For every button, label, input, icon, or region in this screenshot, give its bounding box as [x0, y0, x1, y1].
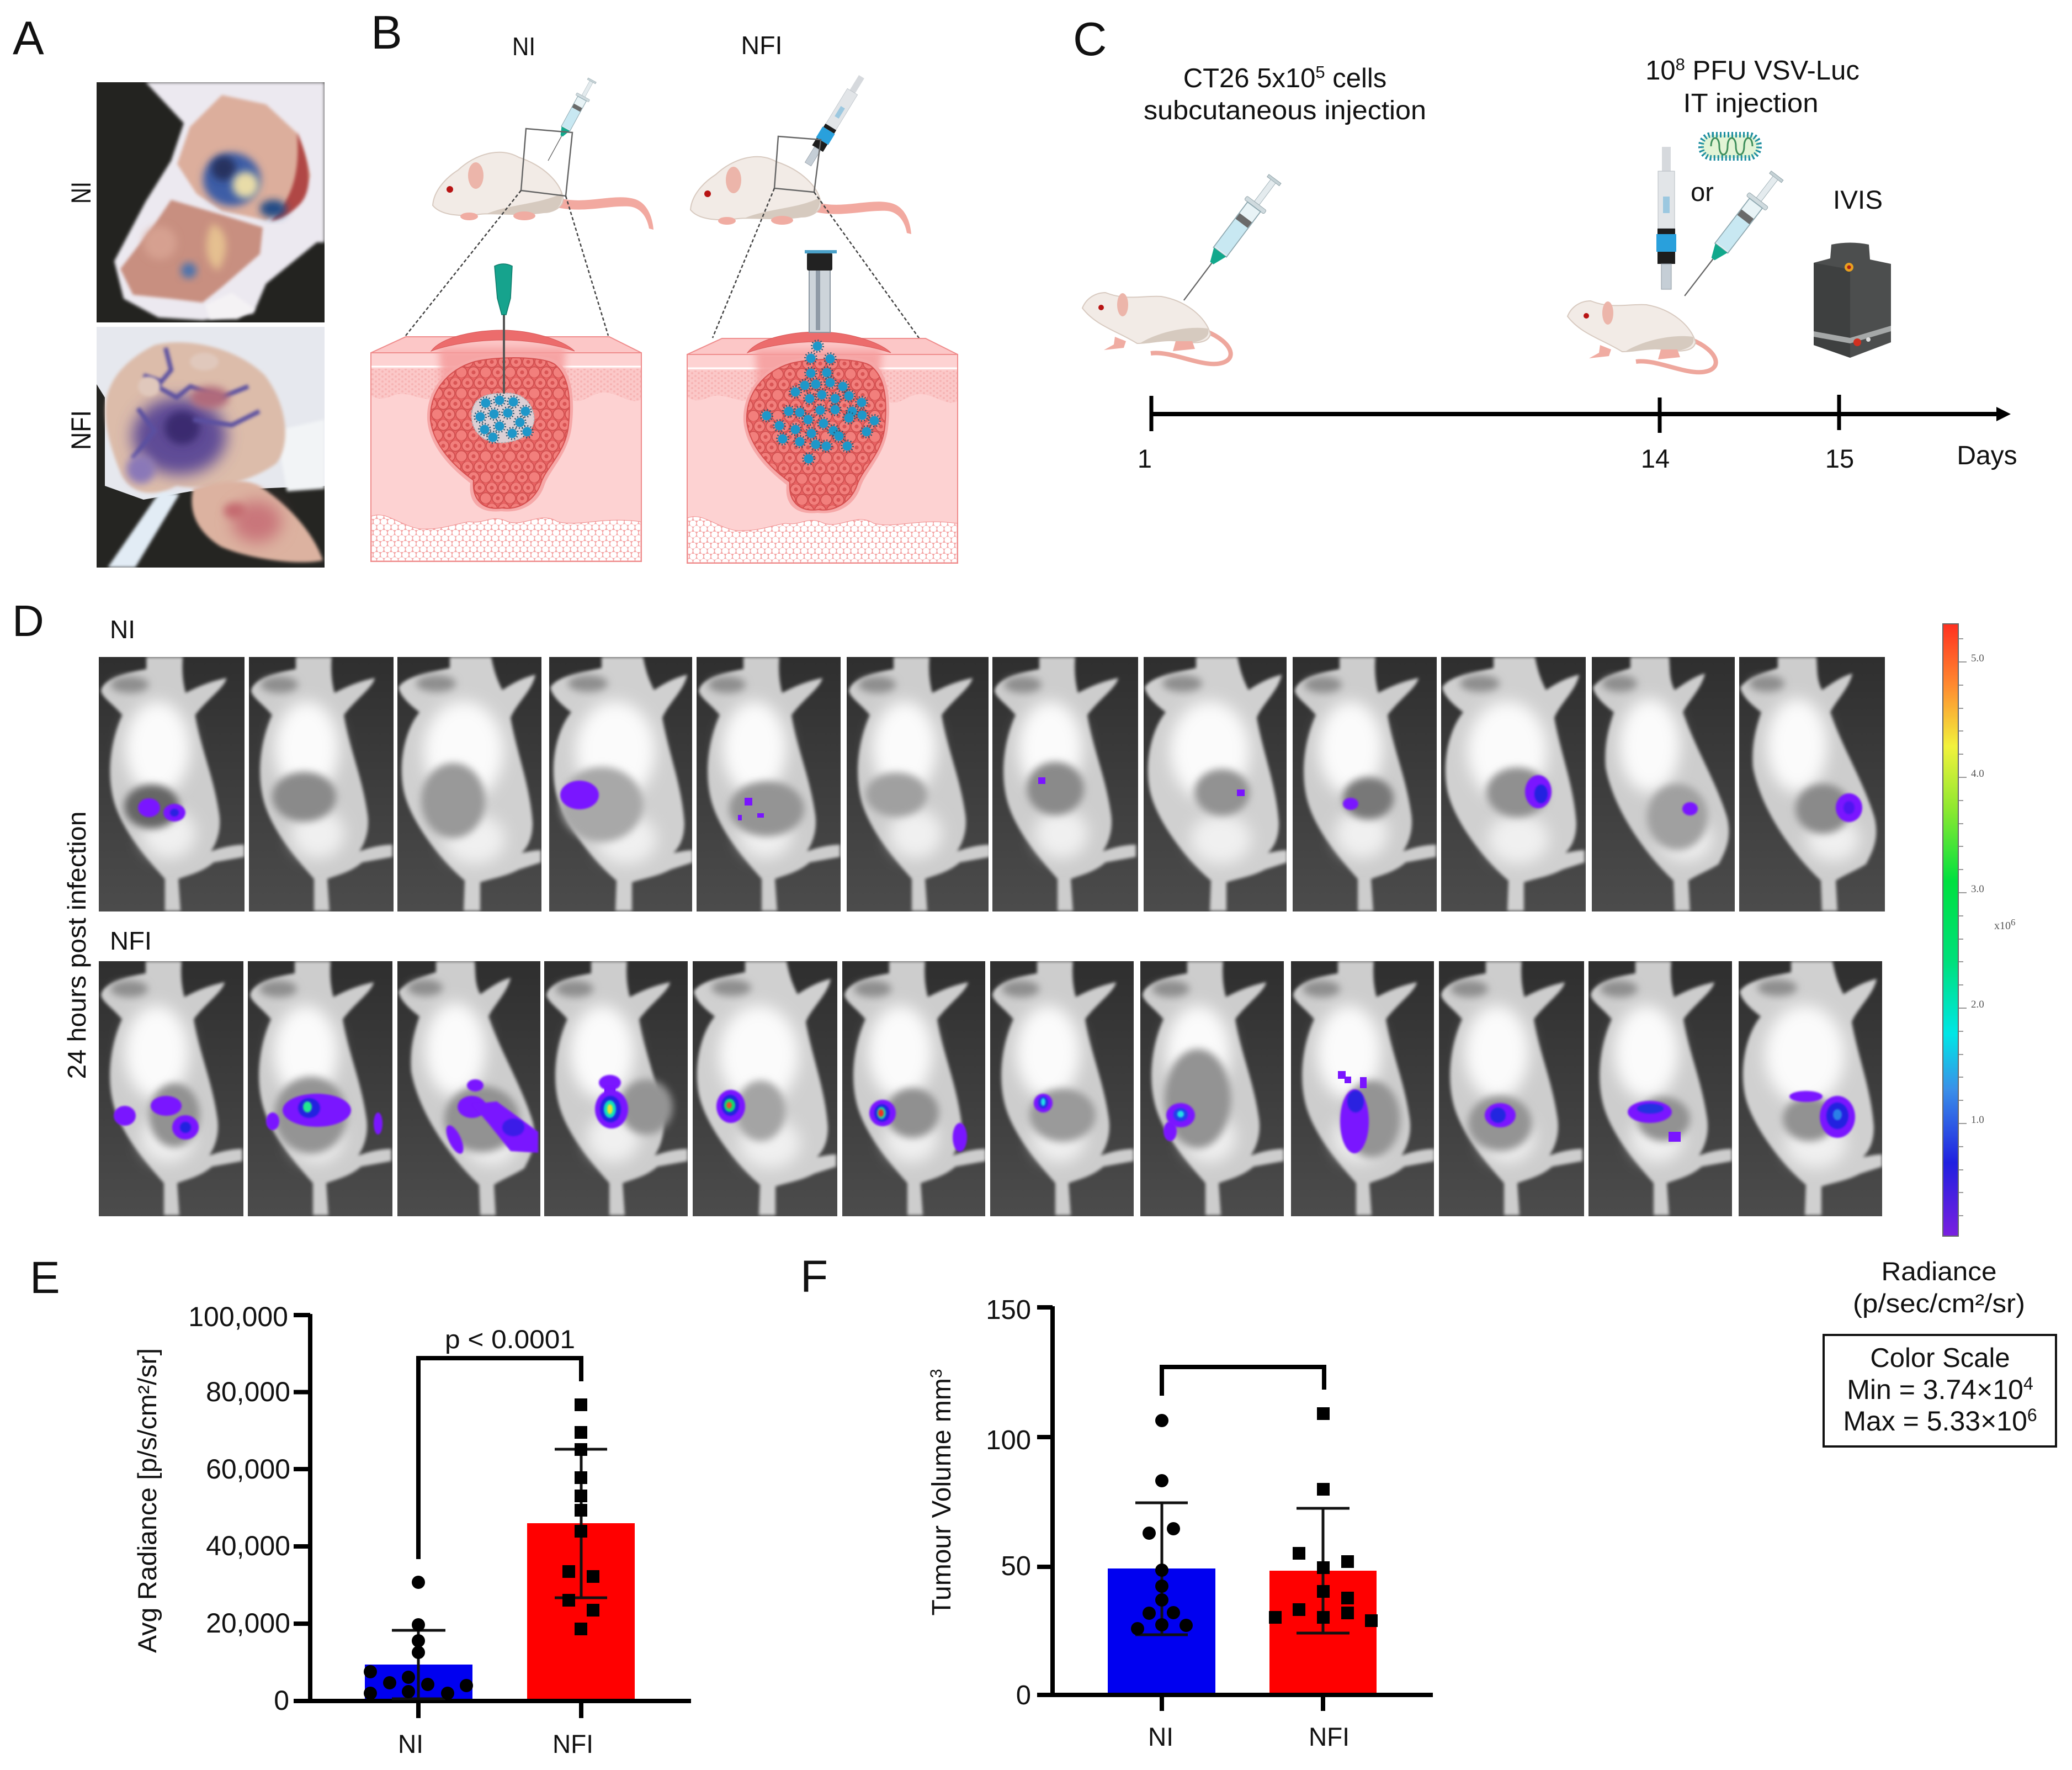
panel A: tumour photographs: [97, 82, 325, 568]
icon: needle-free device NFI: [802, 73, 868, 168]
colour scale title: Radiance: [1881, 1257, 1997, 1286]
heading NFI: NFI: [741, 31, 783, 60]
data points NI: [364, 1576, 473, 1700]
y tick labels: 100,000: [188, 1301, 288, 1332]
text: VSV-Luc dose: 8: [1676, 55, 1685, 74]
text: CT26 injection: cells: [1325, 63, 1386, 93]
label time point: 24 hours post infection: [62, 812, 91, 1079]
colour scale range box: 6: [2027, 1405, 2037, 1425]
y tick labels: 40,000: [206, 1530, 290, 1561]
y tick labels: 150: [986, 1295, 1031, 1325]
timeline arrow: [1151, 395, 2011, 433]
photo: NFI tumour: [97, 327, 325, 568]
NFI mouse 1: [93, 956, 253, 1221]
data points NFI: [562, 1398, 599, 1635]
icon: rat NI: [433, 152, 654, 230]
NI mouse 12: [1734, 651, 1894, 916]
error bars: [392, 1449, 607, 1699]
y tick labels: 20,000: [206, 1608, 290, 1639]
y tick labels: 0: [1016, 1681, 1031, 1710]
text: VSV-Luc dose: 10: [1645, 56, 1676, 86]
colour scale range box: Max = 5.33×10: [1843, 1406, 2027, 1437]
bar NFI: [1269, 1571, 1377, 1695]
NI mouse 3: [397, 657, 541, 912]
data points NI: [1131, 1414, 1193, 1635]
y tick labels: 0: [274, 1685, 289, 1716]
panel label E: E: [30, 1253, 60, 1303]
virus scatter NFI: [761, 340, 880, 465]
bar NI: [365, 1665, 472, 1701]
colour scale title: [1853, 1257, 2025, 1318]
NI mouse 11: [1586, 651, 1746, 916]
panel B: injection schematics: [371, 31, 958, 563]
skin section NFI: [687, 332, 958, 563]
heading NI: NI: [512, 32, 535, 61]
panel F: bar chart tumour volume: [927, 1295, 1433, 1751]
skin section NI: [371, 330, 641, 561]
text: CT26 injection: CT26 5x10: [1183, 63, 1315, 93]
NFI mouse 10: [1433, 956, 1593, 1221]
needle-free nozzle NFI: [805, 250, 837, 332]
NFI mouse 2: [242, 956, 402, 1221]
panel label D: D: [12, 596, 44, 645]
panel C: experimental timeline: [1082, 55, 2017, 473]
NI mouse 5: [697, 657, 841, 912]
y tick labels: 80,000: [206, 1376, 290, 1407]
panel label C: C: [1073, 13, 1107, 66]
icon: syringe day 1: [1174, 172, 1285, 308]
NFI mouse 9: [1285, 956, 1446, 1221]
needle NI: [495, 264, 512, 394]
tick label 14: 14: [1641, 444, 1670, 473]
text: CT26 injection: 5: [1315, 62, 1325, 82]
y axis title: Avg Radiance [p/s/cm²/sr]: [132, 1348, 162, 1653]
NFI mouse 3: [392, 956, 552, 1221]
text: subcutaneous injection: subcutaneous injection: [1144, 96, 1426, 125]
text: Days: Days: [1957, 441, 2017, 470]
text: or: or: [1691, 177, 1714, 206]
colour scale bar: 4.0: [1971, 768, 1984, 780]
text: IT injection: IT injection: [1683, 89, 1818, 118]
icon: rat day 14: [1568, 301, 1716, 372]
x tick label NFI: NFI: [1309, 1722, 1350, 1751]
significance bracket: [418, 1358, 581, 1559]
error bars: [1135, 1503, 1350, 1635]
bar NI: [1108, 1568, 1215, 1695]
NFI mouse 12: [1733, 956, 1893, 1221]
colour scale title: (p/sec/cm²/sr): [1853, 1289, 2025, 1318]
panel D: bioluminescence images: [62, 615, 1894, 1221]
data points NFI: [1269, 1407, 1378, 1627]
virus cluster NI: [471, 393, 534, 443]
NI mouse 10: [1436, 651, 1596, 916]
icon: rat NFI: [690, 157, 911, 234]
panel label B: B: [371, 7, 402, 59]
label NFI row: NFI: [110, 926, 152, 955]
colour scale bar: [1943, 624, 2016, 1236]
NFI mouse 5: [687, 956, 847, 1221]
icon: syringe NI: [541, 77, 599, 164]
colour scale bar: 1.0: [1971, 1114, 1984, 1126]
colour scale range box: Color Scale: [1870, 1343, 2010, 1373]
icon: rat day 1: [1082, 293, 1231, 364]
p value: p < 0.0001: [445, 1324, 575, 1354]
photo: NI tumour: [97, 82, 325, 322]
y tick labels: 100: [986, 1425, 1031, 1455]
icon: needle-free device day 14: [1656, 147, 1676, 289]
NI mouse 7: [987, 651, 1147, 916]
panel label F: F: [800, 1252, 828, 1302]
y tick labels: 60,000: [206, 1454, 290, 1485]
label: NI photo: NI: [66, 182, 97, 204]
NFI mouse 4: [539, 956, 699, 1221]
icon: syringe day 14: [1675, 168, 1787, 303]
colour scale bar: 6: [2011, 917, 2016, 928]
NI mouse 9: [1287, 651, 1447, 916]
text: IVIS: IVIS: [1833, 185, 1883, 214]
colour scale range box: 4: [2023, 1374, 2033, 1393]
NFI mouse 7: [985, 956, 1145, 1221]
colour scale range box: Min = 3.74×10: [1847, 1374, 2023, 1405]
zoom box and lines NI: [406, 129, 608, 336]
colour scale bar: 2.0: [1971, 999, 1984, 1010]
axes: [1037, 1306, 1433, 1711]
x tick label NI: NI: [398, 1729, 423, 1758]
y axis title: 3: [927, 1369, 945, 1378]
icon: virus: [1701, 135, 1759, 158]
tick label 15: 15: [1825, 444, 1854, 473]
NI mouse 1: [99, 657, 245, 912]
NFI mouse 8: [1135, 956, 1295, 1221]
NI mouse 6: [841, 651, 1001, 916]
NFI mouse 6: [837, 956, 997, 1221]
text: VSV-Luc dose: PFU VSV-Luc: [1685, 56, 1860, 86]
colour scale range box: [1824, 1335, 2056, 1446]
NI mouse 4: [549, 657, 692, 912]
NFI mouse 11: [1583, 956, 1743, 1221]
y tick labels: [188, 1301, 290, 1716]
colour scale bar: 3.0: [1971, 883, 1984, 895]
icon: IVIS imager: [1814, 243, 1891, 358]
y axis title: Tumour Volume mm: [927, 1378, 957, 1616]
y tick labels: 50: [1001, 1551, 1031, 1581]
y tick labels: [986, 1295, 1031, 1710]
bar NFI: [527, 1523, 635, 1701]
label: NFI photo: NFI: [66, 410, 97, 450]
panel E: bar chart average radiance: [132, 1301, 691, 1758]
axes: [294, 1314, 691, 1718]
bracket: [1162, 1367, 1324, 1396]
panel label A: A: [13, 12, 44, 65]
colour scale bar: x10: [1994, 920, 2011, 932]
NI mouse 2: [249, 657, 394, 912]
label NI row: NI: [110, 615, 135, 644]
x tick label NFI: NFI: [552, 1729, 593, 1758]
NI mouse 8: [1138, 651, 1298, 916]
colour scale bar: 5.0: [1971, 653, 1984, 664]
zoom box and lines NFI: [713, 136, 920, 340]
x tick label NI: NI: [1148, 1722, 1173, 1751]
tick label 1: 1: [1138, 444, 1152, 473]
